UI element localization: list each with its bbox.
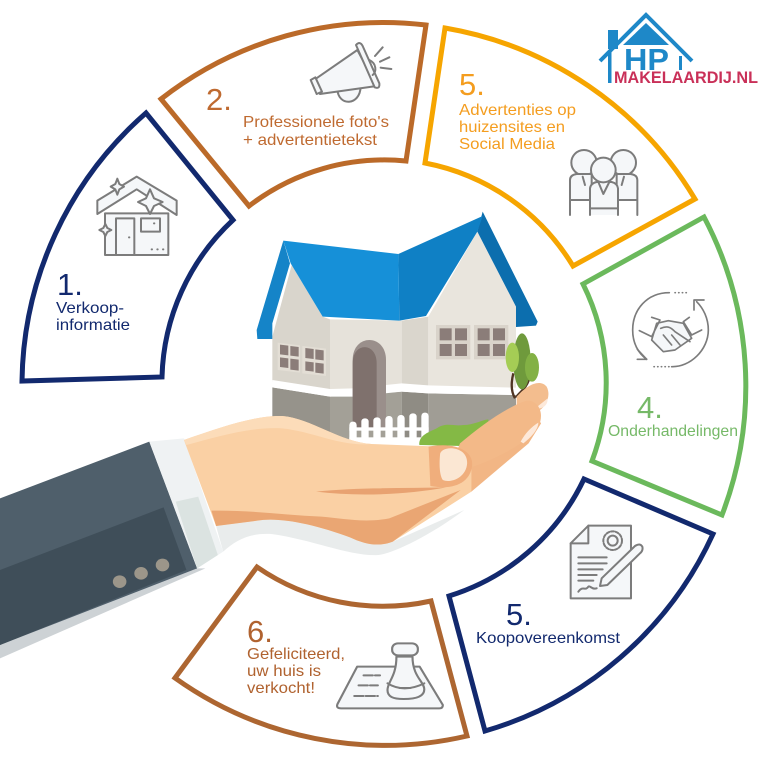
text: Professionele foto's + advertentietekst xyxy=(243,114,389,149)
panel 6: Gefeliciteerd xyxy=(175,567,467,745)
house door xyxy=(353,340,386,430)
panel 3: Advertenties xyxy=(425,28,695,266)
text: Verkoop-informatie xyxy=(56,300,130,334)
house windows xyxy=(278,325,508,376)
heading: 5.: 5. xyxy=(506,597,532,632)
text: Gefeliciteerd, uw huis is verkocht!: verkocht! xyxy=(247,680,315,697)
heading: 2.: 2. xyxy=(206,82,232,117)
panel 5: Koopovereenkomst xyxy=(449,479,713,731)
illustration: thumb xyxy=(429,445,472,487)
icon: stamp xyxy=(337,643,443,708)
house roof xyxy=(257,212,538,339)
icon: clean house xyxy=(97,177,177,255)
logo icon: roof xyxy=(600,15,692,83)
icon: people xyxy=(570,150,637,215)
panel 2: Professionele foto's xyxy=(161,23,426,206)
logo: HP Makelaardij.nl xyxy=(600,15,758,87)
text: Verkoop-informatie: informatie xyxy=(56,317,130,334)
tree xyxy=(506,333,539,398)
heading: 1.: 1. xyxy=(57,267,83,302)
illustration: house xyxy=(257,212,539,450)
text: Onderhandelingen: Onderhandelingen xyxy=(608,423,738,440)
heading: 4.: 4. xyxy=(637,390,663,425)
illustration: hand in suit sleeve xyxy=(0,410,541,658)
text: Gefeliciteerd, uw huis is verkocht!: uw huis is xyxy=(247,663,321,680)
house walls xyxy=(272,232,516,440)
text: Advertenties op huizensites en Social Media: huizensites en xyxy=(459,119,565,136)
heading: 6.: 6. xyxy=(247,614,273,649)
icon: handshake xyxy=(633,293,708,367)
text: Gefeliciteerd, uw huis is verkocht!: Gefeliciteerd, xyxy=(247,646,345,663)
panel 4: Onderhandelingen xyxy=(583,217,746,515)
text: Professionele foto's + advertentietekst: Professionele foto's xyxy=(243,114,389,131)
white fence xyxy=(349,413,429,450)
logo text: HP: HP xyxy=(624,42,669,77)
text: Koopovereenkomst: Koopovereenkomst xyxy=(476,630,621,647)
text: Gefeliciteerd, uw huis is verkocht! xyxy=(247,646,345,697)
heading: 5.: 5. xyxy=(459,67,485,102)
logo text: MAKELAARDIJ.NL: MAKELAARDIJ.NL xyxy=(614,68,758,87)
text: Advertenties op huizensites en Social Media: Advertenties op xyxy=(459,102,576,119)
icon: megaphone xyxy=(311,43,391,102)
panel 1: Verkoopinformatie xyxy=(22,113,233,381)
text: Verkoop-informatie: Verkoop- xyxy=(56,300,124,317)
green bush xyxy=(419,419,488,447)
illustration: fingers xyxy=(453,383,548,467)
text: Advertenties op huizensites en Social Media: Social Media xyxy=(459,136,555,153)
text: Advertenties op huizensites en Social Media xyxy=(459,102,576,153)
text: Professionele foto's + advertentietekst: + advertentietekst xyxy=(243,132,378,149)
icon: contract xyxy=(571,526,643,598)
